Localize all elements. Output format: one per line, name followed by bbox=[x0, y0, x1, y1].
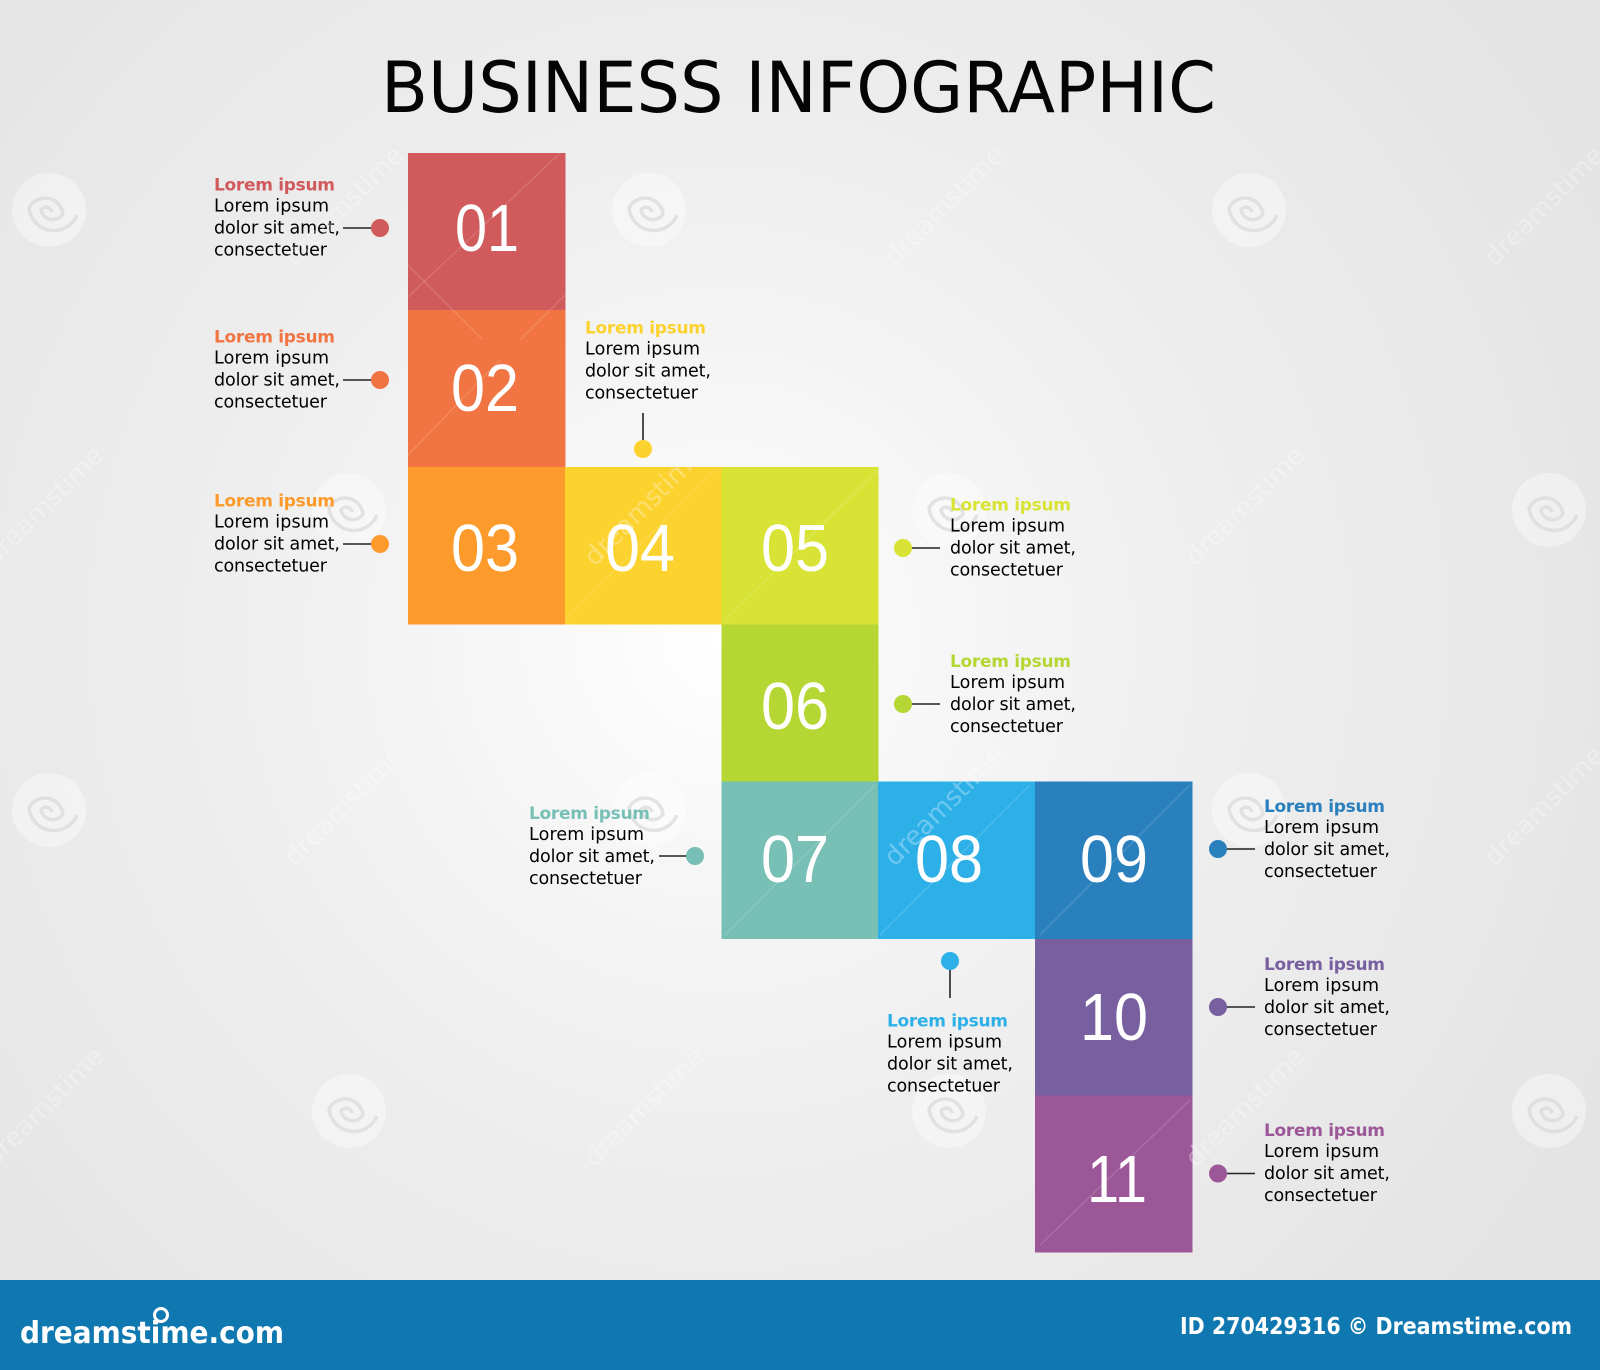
callout 02: dolor sit amet, bbox=[214, 370, 340, 390]
callout 05 bbox=[894, 496, 1076, 580]
square 03: 03 bbox=[451, 511, 519, 586]
square 09: 09 bbox=[1080, 822, 1148, 897]
callout 03: Lorem ipsum bbox=[214, 512, 329, 532]
square 08: 08 bbox=[915, 822, 983, 897]
watermark text and diagonal lines: dreamstime bbox=[579, 1042, 710, 1173]
callout 04: Lorem ipsum bbox=[585, 318, 706, 338]
callout 08: Lorem ipsum bbox=[887, 1032, 1002, 1052]
callout 06: Lorem ipsum bbox=[950, 673, 1065, 693]
callout 08 bbox=[887, 952, 1013, 1096]
callout 02 bbox=[214, 328, 389, 412]
square 10: 10 bbox=[1080, 980, 1148, 1055]
callout 08: consectetuer bbox=[887, 1076, 1001, 1096]
square 11: 11 bbox=[1087, 1142, 1147, 1217]
callout 10: Lorem ipsum bbox=[1264, 976, 1379, 996]
watermark text and diagonal lines: dreamstime bbox=[879, 741, 1010, 872]
callout 09 bbox=[1209, 797, 1390, 882]
callout 04: Lorem ipsum bbox=[585, 340, 700, 360]
callout 09: Lorem ipsum bbox=[1264, 797, 1385, 817]
square 03 bbox=[408, 467, 566, 624]
square 01 bbox=[408, 153, 566, 310]
callout 03: Lorem ipsum bbox=[214, 492, 335, 512]
callout 06 bbox=[894, 652, 1076, 737]
callout 10: dolor sit amet, bbox=[1264, 998, 1390, 1018]
callout 03: dolor sit amet, bbox=[214, 534, 340, 554]
footer band bbox=[0, 1280, 1600, 1370]
callout 09: Lorem ipsum bbox=[1264, 818, 1379, 838]
watermark text and diagonal lines: dreamstime bbox=[279, 141, 410, 272]
watermark text and diagonal lines: dreamstime bbox=[579, 441, 710, 572]
callout 09: consectetuer bbox=[1264, 862, 1378, 882]
square 09 bbox=[1035, 782, 1192, 939]
callout 07: Lorem ipsum bbox=[529, 804, 650, 824]
watermark spirals bbox=[12, 173, 1586, 1148]
watermark text and diagonal lines: dreamstime bbox=[279, 741, 410, 872]
watermark text and diagonal lines: dreamstime bbox=[1180, 441, 1311, 572]
callout 02: Lorem ipsum bbox=[214, 348, 329, 368]
callout 06: dolor sit amet, bbox=[950, 695, 1076, 715]
callout 03: consectetuer bbox=[214, 556, 328, 576]
callout 07 bbox=[529, 804, 704, 889]
callout 11: consectetuer bbox=[1264, 1186, 1378, 1206]
square 07: 07 bbox=[761, 822, 829, 897]
staircase chart of numbered squares bbox=[408, 153, 1192, 1252]
callout 09: dolor sit amet, bbox=[1264, 840, 1390, 860]
callout 10: Lorem ipsum bbox=[1264, 955, 1385, 975]
callout 04: consectetuer bbox=[585, 384, 699, 404]
callout 08: Lorem ipsum bbox=[887, 1012, 1008, 1032]
callout 07: dolor sit amet, bbox=[529, 847, 655, 867]
callout 11 bbox=[1209, 1121, 1390, 1206]
square 02 bbox=[408, 310, 566, 468]
callout 07: Lorem ipsum bbox=[529, 825, 644, 845]
callout 01: Lorem ipsum bbox=[214, 196, 329, 216]
callout 11: dolor sit amet, bbox=[1264, 1164, 1390, 1184]
watermark text and diagonal lines: dreamstime bbox=[1180, 1042, 1311, 1173]
square 10 bbox=[1035, 939, 1192, 1096]
square 04: 04 bbox=[605, 511, 675, 586]
watermark text and diagonal lines: dreamstime bbox=[879, 141, 1010, 272]
square 02: 02 bbox=[451, 351, 519, 426]
square 08 bbox=[878, 782, 1036, 939]
callout 05: consectetuer bbox=[950, 560, 1064, 580]
square 11 bbox=[1035, 1096, 1192, 1252]
callout 08: dolor sit amet, bbox=[887, 1054, 1013, 1074]
callout 10: consectetuer bbox=[1264, 1020, 1378, 1040]
callout 01: dolor sit amet, bbox=[214, 218, 340, 238]
callout 01: consectetuer bbox=[214, 240, 328, 260]
callout 05: Lorem ipsum bbox=[950, 496, 1071, 516]
callout 07: consectetuer bbox=[529, 869, 643, 889]
callout 10 bbox=[1209, 955, 1390, 1040]
callout 06: Lorem ipsum bbox=[950, 652, 1071, 672]
square 06 bbox=[722, 624, 878, 782]
square 01: 01 bbox=[455, 191, 519, 266]
square 05 bbox=[722, 467, 878, 624]
callout 02: consectetuer bbox=[214, 392, 328, 412]
square 06: 06 bbox=[761, 669, 829, 744]
callout 06: consectetuer bbox=[950, 717, 1064, 737]
callout 11: Lorem ipsum bbox=[1264, 1142, 1379, 1162]
callout 04 bbox=[585, 318, 711, 458]
title: BUSINESS INFOGRAPHIC bbox=[381, 47, 1216, 129]
callout 04: dolor sit amet, bbox=[585, 362, 711, 382]
callout 03 bbox=[214, 492, 389, 576]
callout 01 bbox=[214, 176, 389, 260]
callout 02: Lorem ipsum bbox=[214, 328, 335, 348]
callout 11: Lorem ipsum bbox=[1264, 1121, 1385, 1141]
callout 01: Lorem ipsum bbox=[214, 176, 335, 196]
footer logo: dreamstime.com bbox=[20, 1316, 284, 1351]
square 04 bbox=[565, 467, 722, 624]
square 05: 05 bbox=[761, 511, 829, 586]
callout 05: Lorem ipsum bbox=[950, 516, 1065, 536]
callout 05: dolor sit amet, bbox=[950, 538, 1076, 558]
square 07 bbox=[722, 782, 878, 939]
